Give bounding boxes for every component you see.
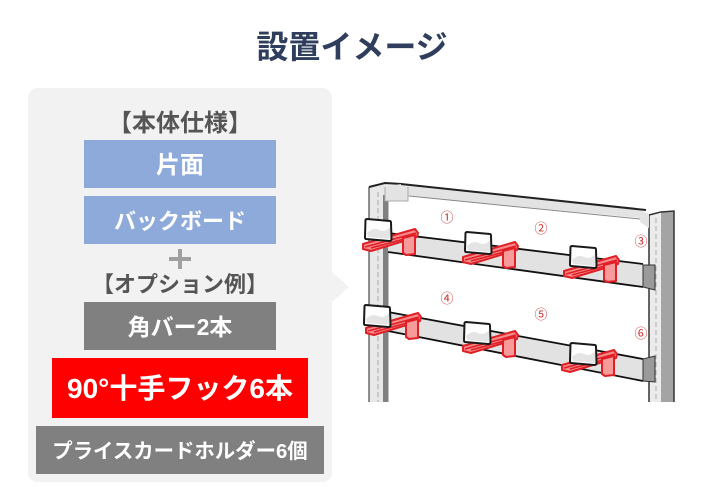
option box: hooks highlighted: 90°十手フック6本 (67, 373, 293, 404)
position numbers: ③ (634, 234, 648, 249)
position numbers: ⑤ (534, 307, 548, 322)
hook 2 (463, 242, 518, 268)
position numbers: ② (534, 221, 548, 236)
hook 6 (562, 350, 617, 376)
option box: square bars (84, 302, 276, 350)
option box: square bars: 角バー2本 (128, 314, 232, 340)
price card holder 3 (570, 246, 596, 268)
icon: plus sign (169, 249, 191, 269)
position numbers: ① (440, 210, 454, 225)
heading: option example: 【オプション例】 (92, 272, 268, 297)
spec box: single sided: 片面 (156, 152, 204, 179)
price card holder 1 (365, 219, 392, 241)
position numbers: ⑥ (634, 326, 648, 341)
price card holder 6 (570, 343, 596, 365)
panel: specifications (28, 88, 348, 482)
hook 1 (363, 229, 418, 255)
price card holder 5 (464, 322, 490, 344)
right post (649, 211, 674, 402)
price card holder 4 (364, 305, 390, 327)
spec box: single sided (84, 140, 276, 188)
hook 5 (463, 331, 518, 357)
option box: hooks highlighted (52, 358, 308, 418)
left post (369, 183, 402, 402)
spec box: back board: バックボード (114, 209, 246, 234)
lower bar (388, 312, 655, 382)
hook 3 (564, 256, 619, 282)
top rail (385, 184, 649, 228)
spec box: back board (84, 196, 276, 244)
position numbers (440, 210, 648, 341)
price card holder 2 (465, 232, 492, 254)
panel background with pointer (28, 88, 348, 482)
position numbers: ④ (440, 291, 454, 306)
title: 設置イメージ (256, 29, 448, 65)
option box: price card holders (36, 426, 324, 474)
option box: price card holders: プライスカードホルダー6個 (52, 441, 308, 463)
upper bar (388, 233, 655, 290)
hook 4 (366, 313, 421, 339)
heading: main unit specification: 【本体仕様】 (108, 110, 252, 136)
